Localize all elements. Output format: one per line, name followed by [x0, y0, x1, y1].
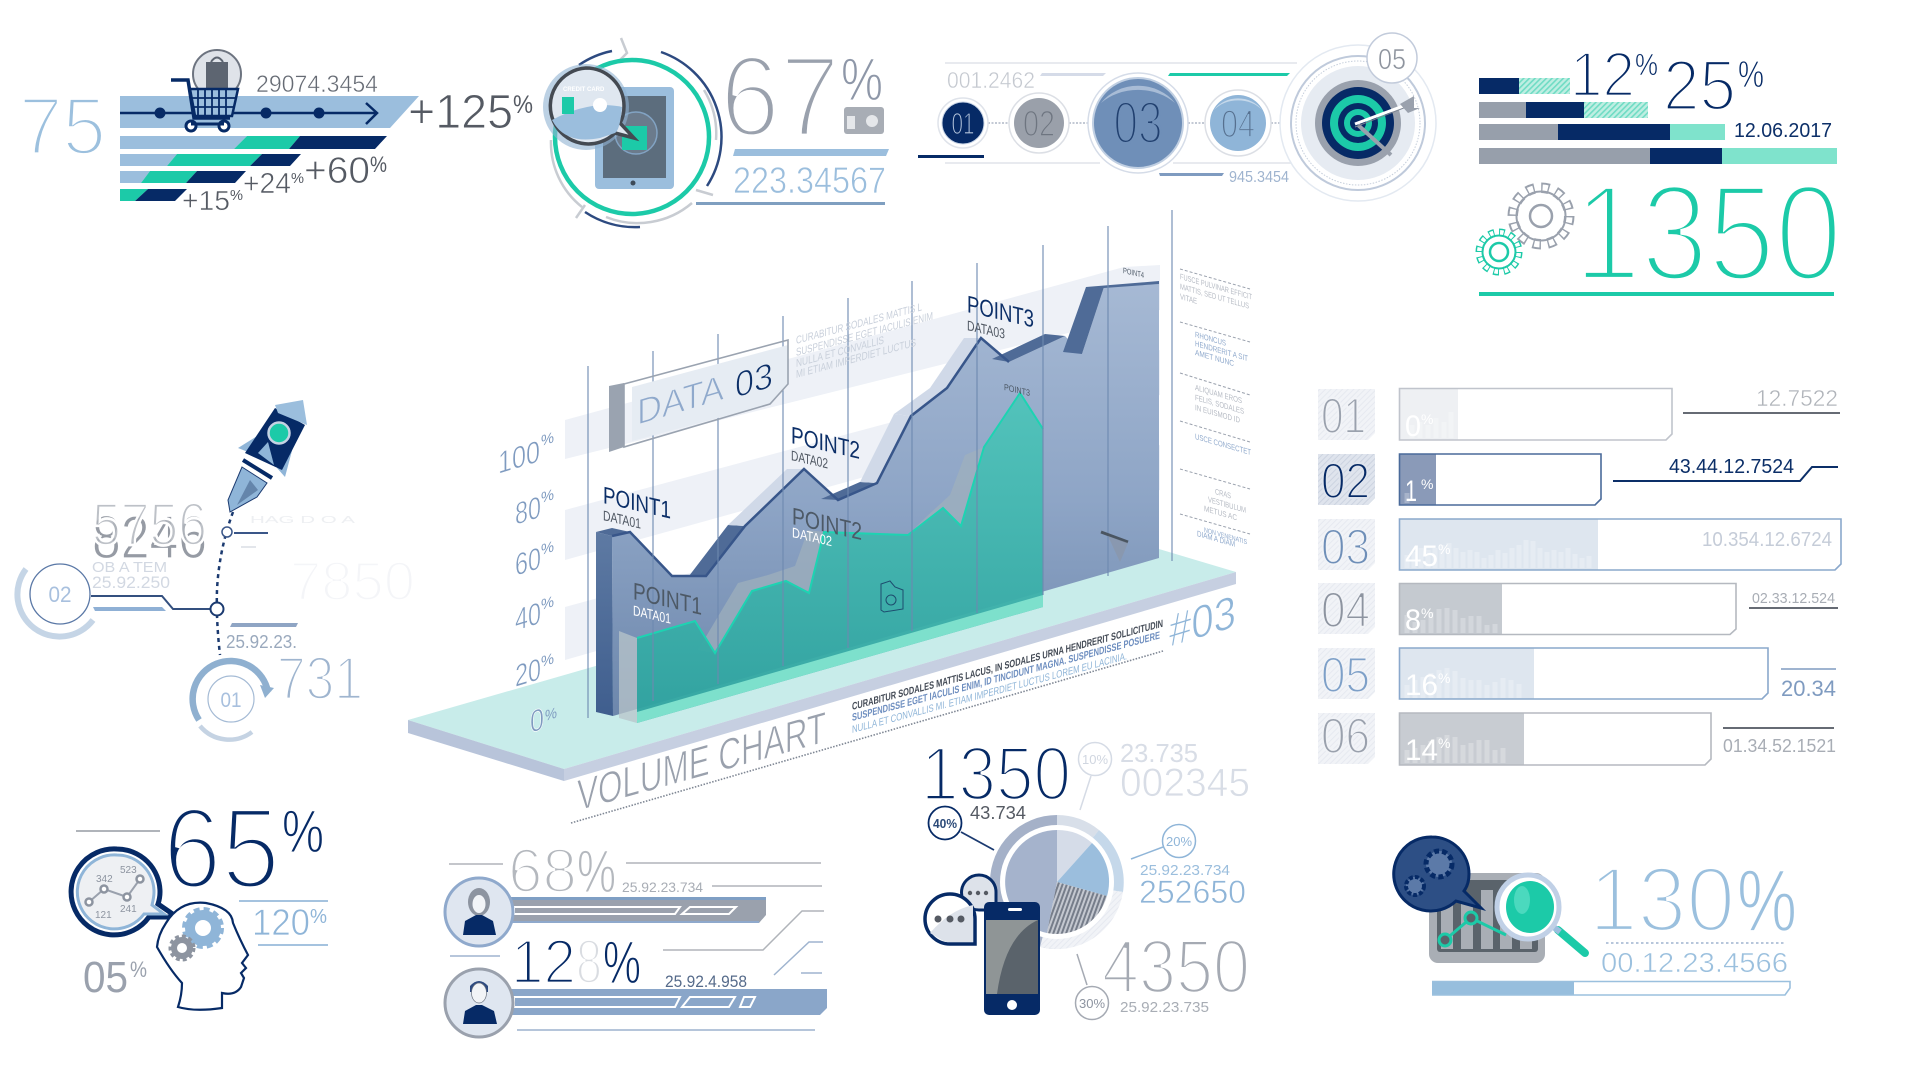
- y axis labels: %: [545, 705, 557, 725]
- value 001.2462: 001.2462: [947, 67, 1035, 93]
- icon: teal trend line: [1439, 912, 1506, 946]
- percent labels: %: [1421, 411, 1433, 427]
- label +60%: +60: [304, 150, 370, 191]
- data 03 tag: 03: [735, 354, 773, 406]
- caption text: CURABITUR SODALES MATTIS L: [796, 301, 922, 347]
- dotted line: [571, 651, 1163, 823]
- faint ghost text: HAG D O A: [250, 515, 356, 526]
- step 05 badge: [1367, 33, 1417, 83]
- panel: top-right stacked bars: [1479, 40, 1842, 310]
- small point labels: POINT3: [1004, 382, 1030, 398]
- number 128 percent: %: [603, 929, 641, 996]
- row numbers: 03: [1321, 519, 1370, 575]
- side notes: [1180, 269, 1252, 549]
- date 12.06.2017: 12.06.2017: [1734, 120, 1832, 142]
- side notes: MATTIS, SED UT TELLUS: [1180, 282, 1249, 311]
- value 43.734: 43.734: [970, 803, 1026, 823]
- row value 12.7522: 12.7522: [1756, 385, 1838, 411]
- teal area: [637, 393, 1043, 723]
- number 128 percent: 8: [576, 928, 602, 997]
- underline: [1479, 292, 1834, 296]
- accent bars: [918, 73, 1290, 176]
- number 05 percent: %: [130, 957, 147, 982]
- data labels dark: DATA02: [791, 448, 828, 473]
- number 128 percent: [511, 928, 641, 997]
- number 67 percent: 67: [720, 33, 840, 161]
- y axis labels: %: [541, 593, 554, 614]
- bottom rule: [517, 1029, 815, 1031]
- side notes: NON VENENATIS: [1204, 526, 1247, 546]
- icon: magnifying glass: [1497, 875, 1585, 953]
- y axis labels: %: [541, 538, 554, 559]
- step 01: [938, 98, 988, 148]
- accent bars: [93, 607, 298, 627]
- background bands: [565, 265, 1160, 660]
- number 68 percent: 68: [508, 837, 577, 906]
- number 12 percent: %: [1635, 47, 1658, 82]
- percent labels: %: [1438, 735, 1450, 751]
- percent labels: 14: [1405, 734, 1438, 767]
- label +24%: +24: [243, 168, 291, 200]
- y axis labels: 0: [530, 700, 544, 740]
- main arrow bar: [120, 96, 419, 128]
- percent labels: %: [1438, 670, 1450, 686]
- side notes: VITAE: [1180, 292, 1197, 306]
- ghost numbers: 5756: [92, 491, 207, 558]
- icon: tablet: [595, 87, 674, 189]
- icon: target with arrow: [1280, 45, 1436, 201]
- caption text: [796, 301, 933, 381]
- icon: mini credit card: [844, 107, 884, 134]
- callout 10%: 10%: [1082, 752, 1108, 767]
- panel: numbered progress rows: [1318, 385, 1841, 767]
- data labels white: DATA01: [633, 603, 671, 628]
- number 128 percent: 12: [511, 928, 576, 997]
- side notes: AMET NUNC: [1195, 348, 1234, 368]
- label +15%: +15: [182, 185, 230, 216]
- description text: NULLA ET CONVALLIS MI. ETIAM IMPERDIET LUCTUS LOREM EU LACINIA.: [852, 650, 1127, 736]
- caption text: SUSPENDISSE EGET IACULIS ENIM: [796, 310, 933, 359]
- percent labels: 0: [1405, 410, 1421, 443]
- row value 01.34.52.1521: 01.34.52.1521: [1723, 736, 1836, 756]
- pie chart: [990, 815, 1124, 949]
- value 00.12.23.4566: 00.12.23.4566: [1601, 947, 1788, 978]
- side notes: ALIQUAM EROS: [1195, 383, 1242, 406]
- value 25.92.23.734: 25.92.23.734: [622, 879, 703, 895]
- number 130 percent: 130: [1589, 849, 1735, 951]
- number 12 percent: 12: [1570, 40, 1635, 110]
- y axis labels: %: [541, 650, 554, 671]
- icon: rocket: [228, 400, 307, 512]
- icon: head with gears: [157, 903, 248, 1010]
- icon: speech bubble chart: [71, 849, 177, 935]
- value 25.92.23.734: 25.92.23.734: [1140, 862, 1230, 879]
- row value 43.44.12.7524: 43.44.12.7524: [1669, 456, 1794, 478]
- panel: step circles and target: [918, 33, 1436, 201]
- avatar: man: [445, 969, 513, 1037]
- value 25.92.4.958: 25.92.4.958: [665, 972, 747, 991]
- step 04: 04: [1221, 103, 1255, 146]
- callout 40%: [928, 806, 994, 850]
- step 01: 01: [952, 106, 974, 141]
- side notes: RHONCUS: [1195, 330, 1226, 348]
- icon: grey gear: [1513, 188, 1569, 244]
- data 03 tag: [609, 340, 788, 452]
- y axis labels: 20: [515, 651, 541, 694]
- step 05 badge: 05: [1378, 44, 1406, 76]
- step 03: 03: [1114, 90, 1162, 156]
- panel: volume chart: [408, 210, 1252, 823]
- column side: [596, 532, 613, 716]
- row value 20.34: 20.34: [1781, 676, 1836, 701]
- step 02: [1009, 93, 1069, 153]
- label +125%: +125: [408, 86, 513, 139]
- icon: speech bubble chart: 241: [120, 904, 137, 915]
- y axis labels: [498, 429, 557, 740]
- side notes: CRAS: [1215, 487, 1231, 501]
- row numbers: 05: [1321, 647, 1370, 703]
- data labels dark: [603, 318, 1005, 533]
- callout 20%: [1131, 824, 1196, 859]
- icon: dashboard: [1429, 873, 1545, 963]
- row value 10.354.12.6724: 10.354.12.6724: [1702, 529, 1832, 551]
- bar outlines: [1400, 388, 1841, 765]
- dotted path: [217, 512, 233, 655]
- number 65 percent: 65: [163, 785, 280, 913]
- row value 43.44.12.7524: [1613, 456, 1838, 481]
- divider lines: [450, 942, 823, 975]
- underline: [696, 202, 885, 205]
- frame lines: [945, 63, 1297, 163]
- ring arcs: [551, 38, 721, 227]
- stacked slanted bars: [120, 136, 387, 201]
- side notes: FUSCE PULVINAR EFFICIT: [1180, 272, 1252, 302]
- timeline nodes: [91, 527, 268, 616]
- panel: shopping cart statistics: [19, 50, 533, 216]
- side notes: USCE CONSECTET: [1195, 432, 1251, 457]
- value 25.92.23.735: 25.92.23.735: [1120, 999, 1209, 1016]
- percent labels: 1: [1405, 475, 1417, 508]
- callout 40%: 40%: [933, 817, 957, 831]
- panel: people bars: [445, 837, 827, 1037]
- base plate: [408, 526, 1236, 781]
- icon: gears bubble: [1394, 837, 1481, 911]
- y axis labels: 100: [498, 433, 540, 481]
- decorative rule lines: [449, 863, 824, 950]
- icon: speech bubble chart: 342: [96, 874, 113, 885]
- number 75: 75: [19, 81, 106, 172]
- value 002345: 002345: [1120, 761, 1250, 805]
- number tiles: [1318, 389, 1375, 764]
- number 25 percent: 25: [1663, 47, 1736, 126]
- row value 02.33.12.524: 02.33.12.524: [1752, 590, 1835, 607]
- bar: [733, 149, 889, 156]
- connector dots: [988, 122, 1316, 124]
- number 4350: 4350: [1102, 925, 1250, 1010]
- side notes: HENDRERIT A SIT: [1195, 339, 1248, 363]
- teal outline: [637, 393, 1043, 653]
- number 120 percent: 120: [252, 902, 310, 943]
- badge 02: 02: [48, 582, 72, 607]
- label +60%: %: [370, 152, 387, 177]
- y axis labels: 80: [515, 489, 541, 532]
- number 68 percent: %: [577, 838, 616, 905]
- y axis labels: 40: [515, 595, 541, 638]
- number 05 percent: 05: [83, 953, 128, 1002]
- step 03: [1088, 73, 1188, 173]
- side notes: DIAM A DIAM: [1197, 529, 1235, 549]
- percent labels: 16: [1405, 669, 1438, 702]
- y axis labels: 60: [515, 540, 541, 583]
- badge 02: [17, 564, 93, 637]
- description text: SUSPENDISSE EGET IACULIS ENIM, ID TINCIDUNT MAGNA. SUSPENDISSE POSUERE: [852, 630, 1160, 724]
- teal shadow: [698, 447, 984, 653]
- dotted line: [1606, 942, 1786, 944]
- panel: head and gears: [71, 785, 328, 1010]
- icon: shopping bag circle: [193, 50, 241, 98]
- point labels navy: POINT3: [967, 291, 1034, 333]
- point labels grey: POINT2: [792, 503, 862, 546]
- y axis labels: %: [541, 486, 554, 507]
- percent labels: 45: [1405, 540, 1438, 573]
- bar 2: [505, 989, 827, 1015]
- label +15%: %: [230, 187, 243, 204]
- data 03 tag: DATA: [637, 367, 724, 433]
- callout 30%: [1076, 954, 1108, 1020]
- label +125%: %: [513, 91, 533, 119]
- row numbers: 04: [1321, 582, 1370, 638]
- bar 1: [505, 897, 766, 923]
- point labels navy: POINT2: [791, 422, 860, 465]
- callout 30%: 30%: [1079, 996, 1105, 1011]
- ghost labels: OB A TEM: [92, 559, 167, 576]
- row numbers: [1321, 388, 1370, 764]
- percent labels: %: [1421, 605, 1433, 621]
- avatar: woman: [445, 878, 513, 946]
- value 252650: 252650: [1139, 874, 1246, 910]
- side notes: IN EUISMOD ID: [1195, 403, 1240, 425]
- icon: speech bubble with card: CREDIT CARD: [563, 87, 605, 93]
- side notes: FELIS, SODALES: [1195, 393, 1244, 416]
- point labels navy: [603, 291, 1034, 525]
- panel: rocket timeline: [17, 400, 415, 740]
- label +24%: %: [291, 170, 304, 187]
- number 731: 731: [277, 645, 363, 712]
- number 120 percent: %: [310, 906, 327, 928]
- number 1350: 1350: [921, 732, 1071, 817]
- data labels dark: DATA01: [603, 508, 641, 533]
- bar rows: [1479, 78, 1837, 164]
- value 23.735: 23.735: [1120, 738, 1198, 768]
- icon: speech bubble chart: 121: [95, 910, 112, 921]
- faint ghost text: [250, 515, 415, 612]
- progress bar: [1432, 981, 1790, 995]
- callout 10%: [1078, 742, 1112, 810]
- hash 03: #03: [1169, 584, 1236, 657]
- panel: tablet credit card: [543, 33, 889, 227]
- callout 20%: 20%: [1166, 834, 1192, 849]
- percent labels: [1405, 410, 1450, 767]
- step 02: 02: [1023, 103, 1055, 144]
- point labels navy: POINT1: [603, 482, 671, 525]
- value 25.92.23.: 25.92.23.: [226, 632, 297, 652]
- small point labels: POINT4: [1123, 266, 1144, 280]
- row value 01.34.52.1521: [1723, 727, 1836, 756]
- caption text: NULLA ET CONVALLIS: [796, 335, 884, 370]
- value 223.34567: 223.34567: [733, 160, 886, 201]
- point labels grey: POINT1: [633, 578, 702, 621]
- icon: smartphone: [984, 902, 1040, 1015]
- panel: phone pie chart: [921, 732, 1250, 1020]
- value 29074.3454: 29074.3454: [256, 71, 378, 98]
- step 04: [1205, 90, 1271, 156]
- icon: shopping cart: [171, 80, 238, 131]
- number 25 percent: %: [1738, 54, 1764, 95]
- fills: [1399, 388, 1598, 765]
- small front column: [619, 631, 637, 723]
- value 945.3454: 945.3454: [1229, 169, 1289, 186]
- blue outline: [612, 338, 1009, 576]
- mini bar charts: [1407, 412, 1589, 763]
- percent labels: 8: [1405, 604, 1421, 637]
- side notes: METUS AC: [1204, 504, 1237, 522]
- row numbers: 01: [1321, 388, 1366, 444]
- title: volume chart: VOLUME CHART: [577, 702, 826, 821]
- number 130 percent: %: [1737, 851, 1797, 950]
- badge 01: 01: [220, 689, 242, 712]
- divider: [76, 830, 160, 832]
- percent labels: %: [1438, 541, 1450, 557]
- percent labels: %: [1421, 476, 1433, 492]
- row numbers: 06: [1321, 708, 1370, 764]
- point labels grey: [633, 503, 862, 621]
- icon: speech bubble with card: [543, 64, 634, 150]
- badge 01: [193, 661, 274, 740]
- icon: teal gear: [1480, 232, 1518, 272]
- icon: speech bubble chart: 523: [120, 865, 137, 876]
- y axis labels: %: [541, 429, 554, 450]
- number 65 percent: %: [282, 798, 324, 865]
- number 120 percent: [239, 900, 328, 946]
- dark extrusion bands: [596, 281, 1159, 577]
- caption text: MI ETIAM IMPERDIET LUCTUS: [796, 337, 916, 381]
- number 67 percent: %: [841, 46, 883, 113]
- blue area: [612, 284, 1159, 716]
- ghost numbers: 8246: [92, 504, 207, 571]
- data labels white: [633, 525, 832, 628]
- small point labels: [1004, 266, 1144, 398]
- ghost labels: 25.92.250: [92, 573, 170, 592]
- data labels dark: DATA03: [967, 318, 1005, 343]
- description text: CURABITUR SODALES MATTIS LACUS, IN SODALES URNA HENDRERIT SOLLICITUDIN: [852, 618, 1163, 713]
- ghost labels: [92, 559, 170, 592]
- funnel shadow: [1101, 532, 1128, 562]
- row numbers: 02: [1321, 453, 1370, 509]
- number 68 percent: [508, 837, 616, 906]
- icon: chat bubbles: [925, 875, 996, 944]
- faint ghost text: 7850: [290, 550, 415, 612]
- vertical grid lines: [588, 210, 1172, 718]
- number 1350: 1350: [1574, 157, 1842, 310]
- side notes: VESTIBULUM: [1208, 495, 1246, 515]
- icon: document: [881, 581, 903, 612]
- teal base strip: [637, 595, 1043, 723]
- panel: analytics magnifier: [1394, 837, 1797, 995]
- data labels white: DATA02: [792, 525, 832, 550]
- light extrusion bands: [728, 338, 981, 526]
